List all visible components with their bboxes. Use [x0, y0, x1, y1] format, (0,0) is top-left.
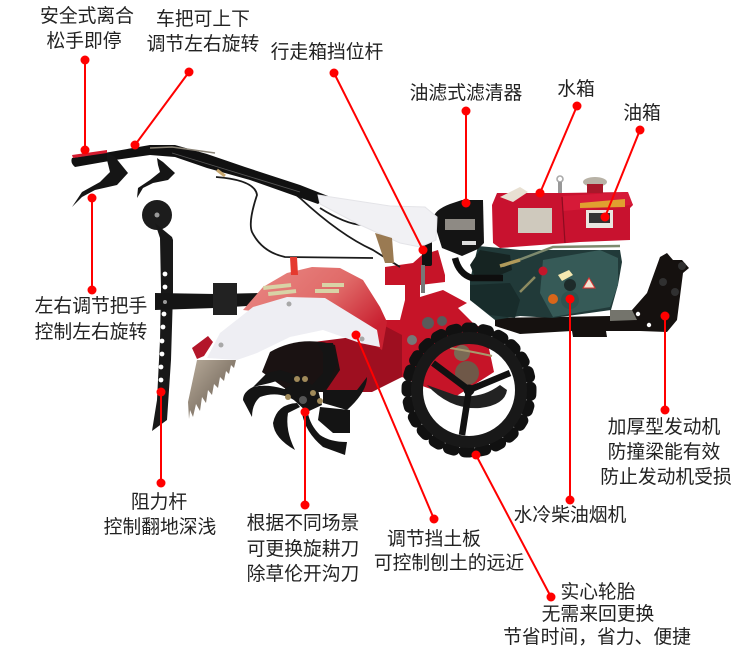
leader: diesel engine — [566, 294, 574, 504]
label: blades — [247, 512, 359, 584]
bumper and base rail — [495, 253, 689, 337]
leader: blades — [300, 408, 310, 510]
label: blades: 可更换旋耕刀 — [247, 538, 359, 559]
air filter — [433, 200, 484, 256]
label: left right handle: 左右调节把手 — [35, 295, 147, 316]
leader: solid tyre — [472, 450, 556, 602]
label: soil guard: 可控制刨土的远近 — [374, 552, 524, 573]
label: solid tyre: 无需来回更换 — [542, 603, 655, 624]
engine body — [455, 246, 622, 320]
cables — [216, 177, 400, 267]
label: solid tyre: 节省时间，省力、便捷 — [503, 626, 691, 647]
label: bumper: 防止发动机受损 — [600, 466, 732, 487]
label: oil filter: 油滤式滤清器 — [410, 82, 523, 103]
leader: bumper — [660, 312, 670, 414]
callout lines — [80, 56, 670, 602]
label: left right handle — [35, 295, 147, 342]
tiller blades — [243, 341, 367, 455]
drive wheel — [408, 328, 530, 452]
label: blades: 除草伦开沟刀 — [247, 563, 359, 584]
label: clutch: 安全式离合 — [40, 5, 134, 26]
label: resistance rod: 控制翻地深浅 — [104, 516, 216, 537]
leader: left right handle — [88, 194, 96, 294]
label: clutch: 松手即停 — [46, 30, 122, 51]
resistance rod with wheel — [142, 200, 262, 431]
label: handle — [147, 8, 259, 54]
leader: resistance rod — [156, 388, 166, 488]
white handle panel — [318, 195, 437, 247]
label: resistance rod — [104, 491, 216, 537]
tiller machine — [71, 145, 689, 455]
label: blades: 根据不同场景 — [247, 512, 359, 533]
leader: clutch — [80, 56, 90, 154]
red frame — [290, 240, 507, 408]
leader: gear lever — [330, 68, 428, 254]
leader: soil guard — [352, 330, 438, 524]
label: soil guard — [374, 528, 524, 573]
label: solid tyre: 实心轮胎 — [560, 581, 636, 602]
hand levers — [72, 153, 175, 207]
label: left right handle: 控制左右旋转 — [35, 321, 147, 342]
handlebars — [71, 145, 328, 204]
label: clutch — [40, 5, 134, 51]
label: bumper: 防撞梁能有效 — [608, 441, 721, 462]
leader: handle up down — [130, 68, 194, 150]
label: bumper: 加厚型发动机 — [608, 416, 721, 437]
red scraper bracket — [192, 336, 213, 359]
label: handle: 调节左右旋转 — [147, 33, 259, 54]
label: fuel tank: 油箱 — [623, 102, 661, 123]
label: bumper — [600, 416, 732, 487]
white hood panel — [207, 297, 380, 360]
leader: fuel tank — [600, 126, 644, 222]
label: resistance rod: 阻力杆 — [131, 491, 187, 512]
label: gear lever: 行走箱挡位杆 — [271, 41, 384, 62]
label: handle: 车把可上下 — [156, 8, 250, 29]
leader: water tank — [536, 102, 582, 198]
red hood — [243, 267, 387, 350]
label: diesel engine: 水冷柴油烟机 — [514, 504, 627, 525]
bracket under panel — [375, 233, 394, 263]
label: soil guard: 调节挡土板 — [387, 528, 481, 549]
label: water tank: 水箱 — [557, 78, 595, 99]
serrated scraper — [188, 360, 236, 419]
leader: oil filter — [462, 106, 470, 208]
red engine tank — [492, 176, 633, 248]
label: solid tyre — [503, 581, 691, 647]
